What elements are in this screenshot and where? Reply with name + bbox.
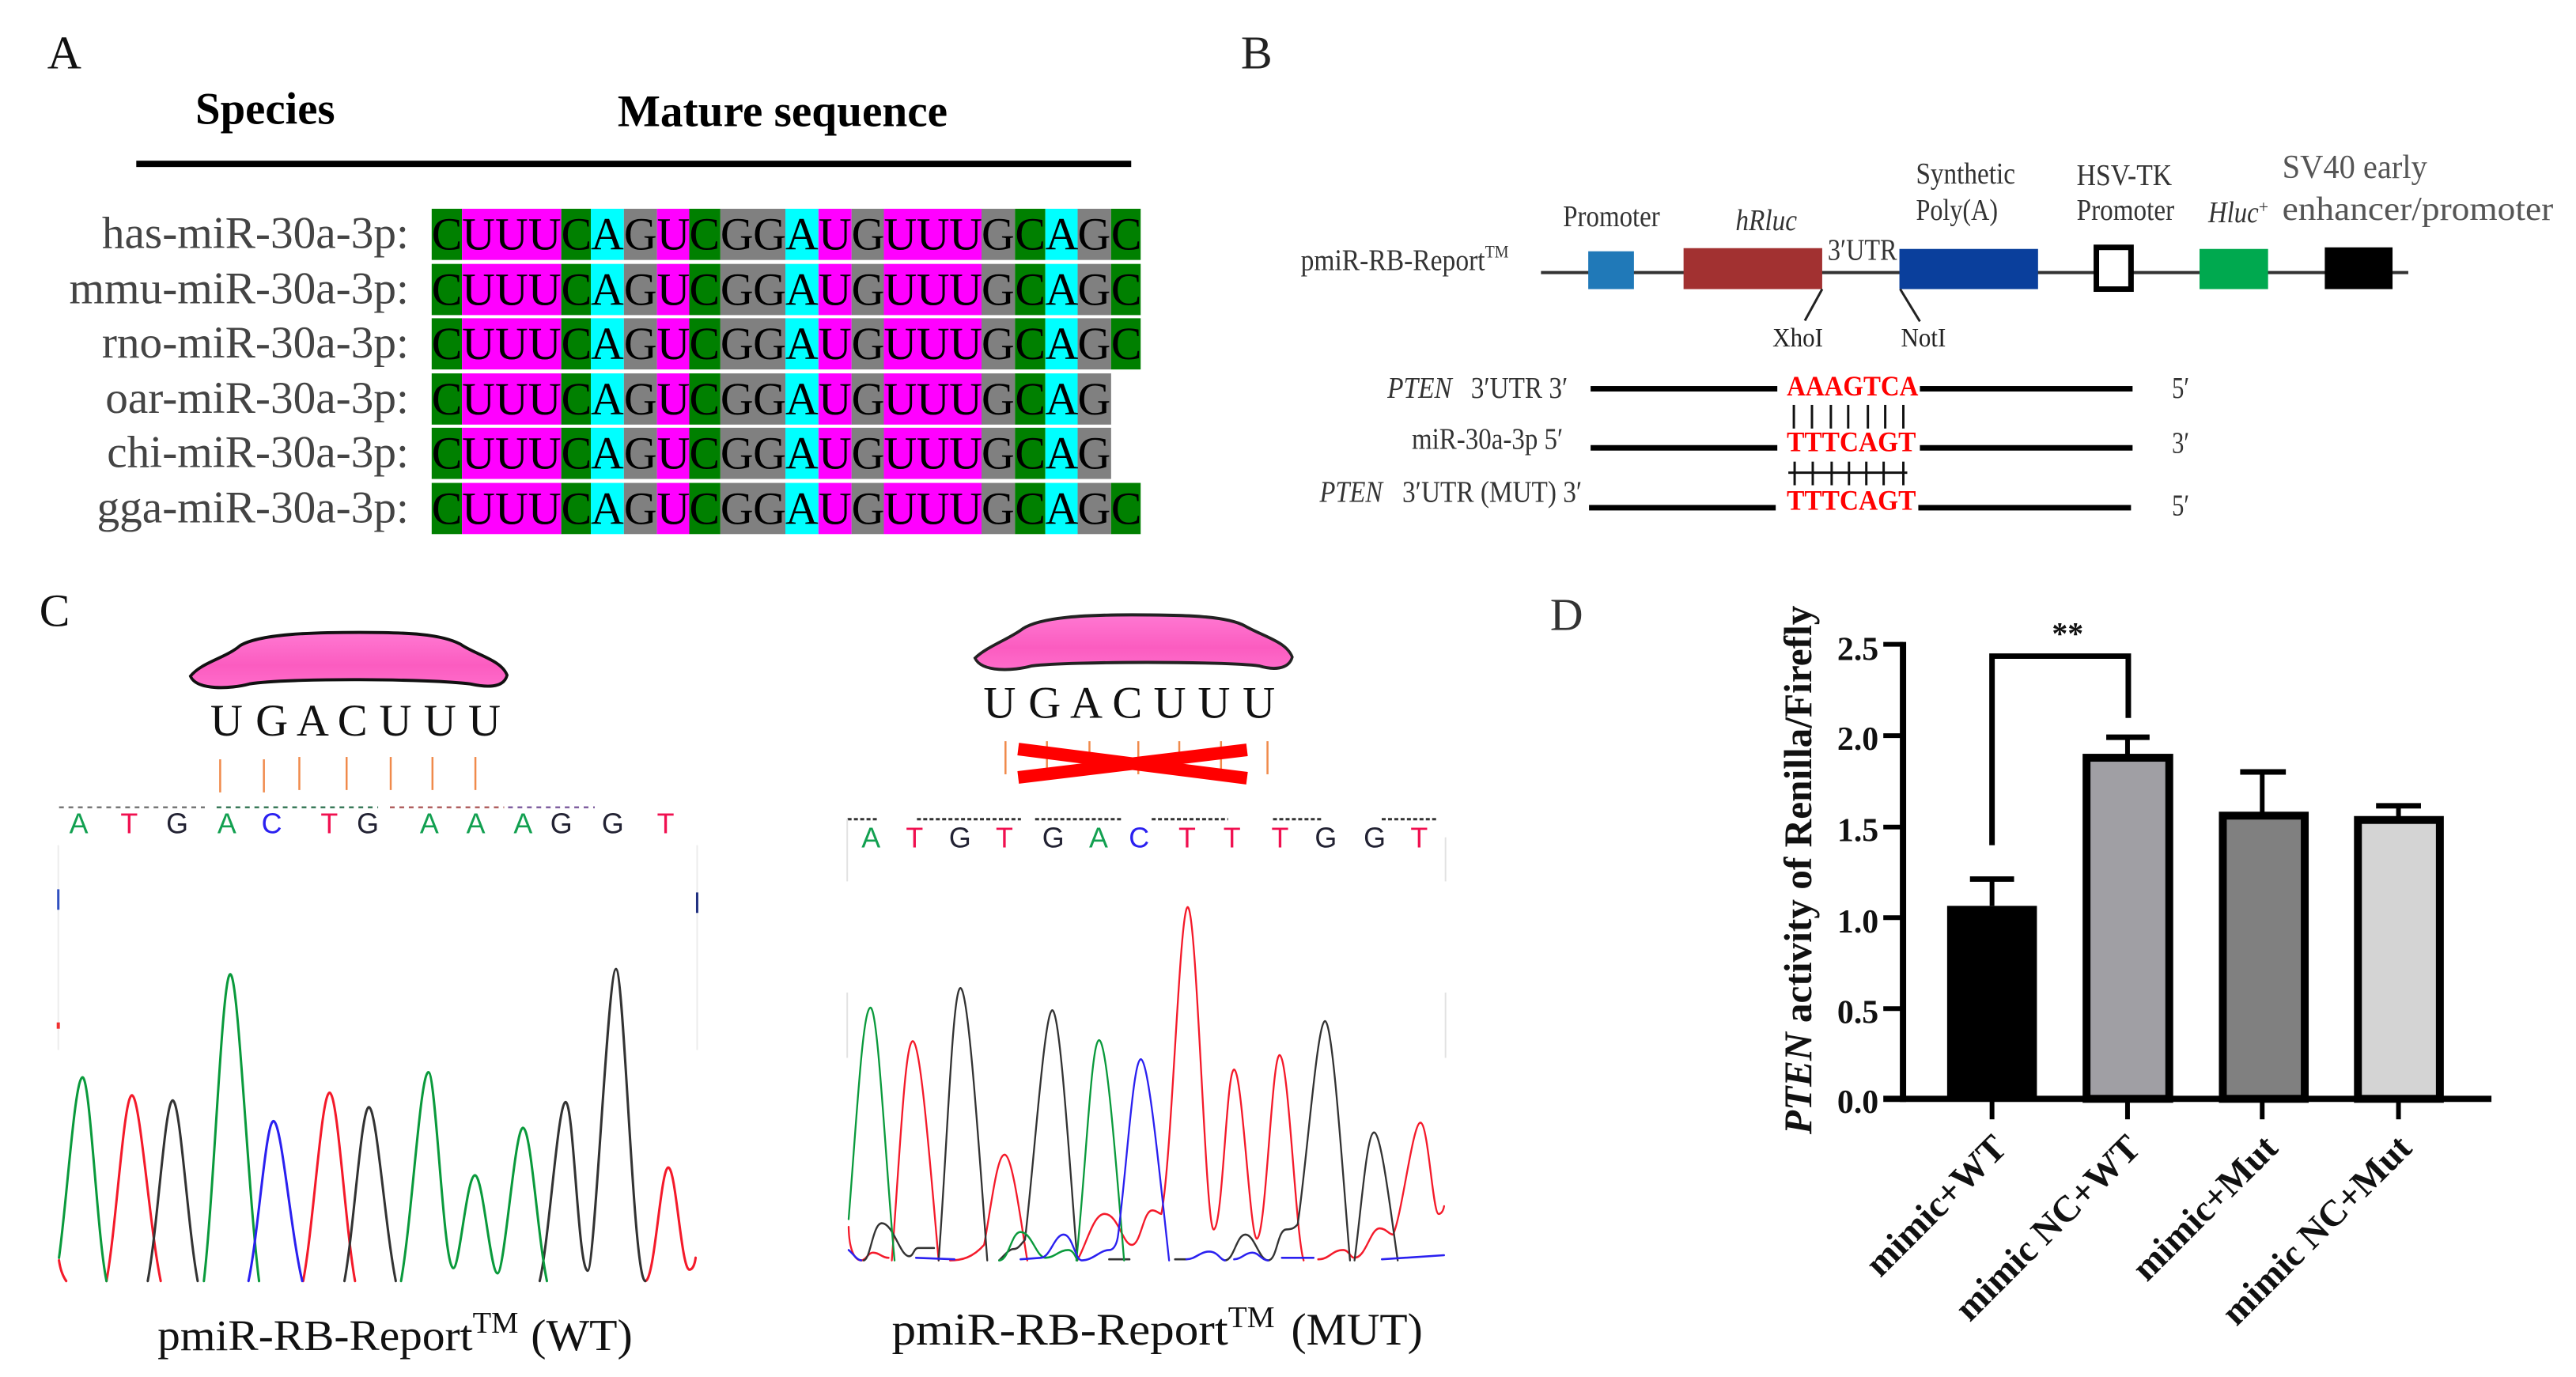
label: 3'UTR: 3′UTR — [1828, 234, 1897, 267]
bar: mimic NC+Mut — [2358, 806, 2440, 1099]
element: HSV-TK promoter box — [2097, 248, 2131, 289]
called bases WT: T — [320, 808, 338, 840]
row: oar-miR-30a-3p — [105, 373, 1111, 425]
called bases WT — [70, 808, 675, 840]
called bases MUT: G — [949, 823, 971, 854]
site row 3: PTEN 3'UTR MUT: 5′ — [2172, 489, 2189, 522]
base-pairing ticks — [1794, 405, 1904, 429]
column heading: mature sequence: Mature sequence — [618, 86, 948, 136]
side marks MUT — [847, 819, 1446, 1058]
bar: mimic+WT — [1947, 879, 2037, 1099]
pairing ticks MUT — [1005, 741, 1268, 774]
label: synthetic poly(A) — [1916, 157, 2015, 227]
axes — [1883, 642, 2491, 1119]
restriction site lines — [1805, 289, 1920, 321]
called bases MUT: C — [1129, 823, 1149, 854]
significance stars: ** — [2052, 616, 2083, 652]
icon: red cross — [1018, 749, 1247, 778]
site row 2: miR-30a-3p: TTTCAGT — [1787, 426, 1916, 458]
x label: mimic+Mut: mimic+Mut — [2124, 1127, 2286, 1289]
y axis tick labels — [1837, 632, 1878, 1121]
label: HSV-TK promoter: Promoter — [2077, 194, 2174, 227]
panel letter C: C — [40, 587, 70, 637]
called bases WT: A — [70, 808, 89, 840]
panel letter B: B — [1241, 27, 1273, 79]
WT construct — [40, 587, 697, 1360]
label: hRluc: hRluc — [1735, 204, 1797, 237]
row: chi-miR-30a-3p: CUUUCAGUCGGAUGUUUGCAG — [432, 429, 1110, 479]
panel B: reporter vector and binding sites — [1241, 27, 2553, 522]
site row 1: PTEN 3'UTR: PTEN — [1386, 372, 1453, 405]
called bases WT: G — [357, 808, 379, 840]
panel A: sequence alignment — [47, 27, 1141, 534]
vector name: pmiR-RB-Report — [1301, 244, 1485, 278]
header rule — [136, 161, 1131, 167]
side marks WT — [59, 845, 697, 1050]
label: promoter: Promoter — [1563, 200, 1660, 233]
called bases MUT: A — [861, 823, 880, 854]
label: synthetic poly(A): Synthetic — [1916, 157, 2015, 191]
site row 1: PTEN 3'UTR: AAAGTCA — [1787, 370, 1919, 402]
row: gga-miR-30a-3p: gga-miR-30a-3p: — [97, 482, 409, 532]
called bases MUT: T — [1272, 823, 1289, 854]
panel letter D: D — [1550, 591, 1583, 641]
called bases MUT: G — [1314, 823, 1337, 854]
caption WT: pmiR-RB-Report — [157, 1311, 473, 1360]
called bases WT: A — [467, 808, 486, 840]
label: synthetic poly(A): Poly(A) — [1916, 194, 1998, 227]
row: mmu-miR-30a-3p: CUUUCAGUCGGAUGUUUGCAGC — [432, 265, 1141, 315]
called bases WT: T — [657, 808, 675, 840]
label: NotI: NotI — [1901, 323, 1946, 353]
caption WT — [157, 1307, 633, 1360]
vector backbone line — [1541, 271, 2408, 274]
x label: mimic NC+Mut: mimic NC+Mut — [2214, 1127, 2420, 1333]
row: rno-miR-30a-3p: CUUUCAGUCGGAUGUUUGCAGC — [432, 320, 1141, 369]
row: has-miR-30a-3p: CUUUCAGUCGGAUGUUUGCAGC — [432, 210, 1141, 260]
caption MUT — [891, 1301, 1423, 1355]
site row 1: PTEN 3'UTR: 3′UTR 3′ — [1471, 372, 1568, 405]
label: SV40 early enhancer/promoter: SV40 early — [2283, 149, 2427, 186]
panel D: bar chart — [1550, 591, 2491, 1333]
called bases MUT: G — [1042, 823, 1065, 854]
element: promoter box — [1588, 252, 1634, 289]
called bases WT: G — [550, 808, 573, 840]
called bases WT: T — [120, 808, 138, 840]
chromatogram MUT — [849, 907, 1444, 1261]
site row 2: miR-30a-3p: miR-30a-3p 5′ — [1412, 423, 1563, 456]
panel letter A: A — [47, 27, 81, 79]
row: oar-miR-30a-3p: oar-miR-30a-3p: — [105, 373, 409, 423]
label: Hluc+: Hluc — [2207, 196, 2259, 229]
site row 2: miR-30a-3p — [1412, 423, 2189, 460]
miRNA seed letters MUT: UGACUUU — [983, 679, 1275, 728]
site row 1: PTEN 3'UTR: 5′ — [2172, 372, 2189, 405]
row: chi-miR-30a-3p: chi-miR-30a-3p: — [107, 428, 409, 478]
y axis tick labels: 2.0 — [1837, 721, 1878, 758]
quality dashes WT — [59, 807, 595, 808]
label: SV40 early enhancer/promoter: enhancer/promoter — [2283, 191, 2553, 228]
y axis title: PTEN activity of Renilla/Firefly — [1776, 605, 1820, 1135]
element: hRluc box — [1684, 248, 1822, 289]
called bases WT: G — [602, 808, 624, 840]
called bases MUT: T — [1410, 823, 1428, 854]
caption MUT: TM — [1228, 1301, 1275, 1334]
called bases WT: C — [262, 808, 282, 840]
row: rno-miR-30a-3p — [102, 318, 1141, 369]
called bases WT: G — [166, 808, 188, 840]
x label: mimic+WT: mimic+WT — [1857, 1127, 2014, 1284]
row: oar-miR-30a-3p: CUUUCAGUCGGAUGUUUGCAG — [432, 375, 1110, 425]
panel C: sequencing chromatograms — [40, 587, 1446, 1360]
caption MUT: pmiR-RB-Report — [891, 1305, 1228, 1355]
column heading: species: Species — [195, 84, 335, 134]
site row 3: PTEN 3'UTR MUT: 3′UTR (MUT) 3′ — [1402, 475, 1582, 509]
site row 3: PTEN 3'UTR MUT — [1319, 475, 2189, 522]
site row 3: PTEN 3'UTR MUT: TTTCAGT — [1787, 484, 1916, 516]
label: XhoI: XhoI — [1772, 323, 1823, 353]
MUT construct — [847, 615, 1446, 1355]
element: SV40 box — [2324, 248, 2393, 289]
row: chi-miR-30a-3p — [107, 428, 1111, 479]
y axis tick labels: 2.5 — [1837, 632, 1878, 668]
quality dashes MUT — [848, 818, 1437, 820]
site row 2: miR-30a-3p: 3′ — [2172, 427, 2189, 460]
element: synthetic poly(A) box — [1900, 249, 2038, 289]
called bases WT: A — [420, 808, 439, 840]
caption WT: TM — [473, 1307, 518, 1340]
called bases MUT: T — [996, 823, 1013, 854]
label: Hluc+: + — [2259, 197, 2268, 217]
y axis tick labels: 0.0 — [1837, 1084, 1878, 1121]
site row 1: PTEN 3'UTR — [1386, 370, 2189, 405]
row: mmu-miR-30a-3p: mmu-miR-30a-3p: — [69, 263, 409, 313]
label: HSV-TK promoter — [2077, 159, 2174, 227]
label: SV40 early enhancer/promoter — [2283, 149, 2553, 228]
called bases MUT: T — [1178, 823, 1196, 854]
element: Hluc box — [2200, 249, 2268, 289]
called bases MUT: G — [1364, 823, 1386, 854]
chromatogram WT — [59, 969, 696, 1281]
called bases WT: A — [218, 808, 236, 840]
row: has-miR-30a-3p: has-miR-30a-3p: — [102, 209, 409, 259]
label: HSV-TK promoter: HSV-TK — [2077, 159, 2172, 192]
significance bracket — [1992, 656, 2128, 845]
site row 3: PTEN 3'UTR MUT: PTEN — [1319, 475, 1384, 509]
y axis tick labels: 0.5 — [1837, 995, 1878, 1031]
bar: mimic NC+WT — [2086, 737, 2169, 1099]
row: mmu-miR-30a-3p — [69, 263, 1141, 315]
caption MUT: (MUT) — [1291, 1305, 1423, 1355]
miRNA seed letters WT: UGACUUU — [210, 696, 501, 746]
called bases MUT: T — [1224, 823, 1241, 854]
icon: pink miRNA blob WT — [191, 633, 507, 687]
pairing ticks WT — [220, 757, 475, 793]
x label: mimic NC+WT: mimic NC+WT — [1947, 1127, 2149, 1329]
called bases MUT: A — [1089, 823, 1108, 854]
row: rno-miR-30a-3p: rno-miR-30a-3p: — [102, 318, 409, 368]
row: has-miR-30a-3p — [102, 209, 1141, 260]
vector name: TM — [1485, 242, 1509, 262]
caption WT: (WT) — [531, 1311, 633, 1360]
row: gga-miR-30a-3p: CUUUCAGUCGGAUGUUUGCAGC — [432, 484, 1141, 534]
y axis tick labels: 1.0 — [1837, 904, 1878, 940]
called bases MUT: T — [906, 823, 923, 854]
called bases MUT — [861, 823, 1428, 854]
icon: pink miRNA blob MUT — [975, 615, 1292, 670]
bar: mimic+Mut — [2222, 772, 2305, 1099]
called bases WT: A — [513, 808, 532, 840]
y axis tick labels: 1.5 — [1837, 813, 1878, 849]
disrupted pairing ticks — [1788, 462, 1908, 486]
row: gga-miR-30a-3p — [97, 482, 1141, 534]
